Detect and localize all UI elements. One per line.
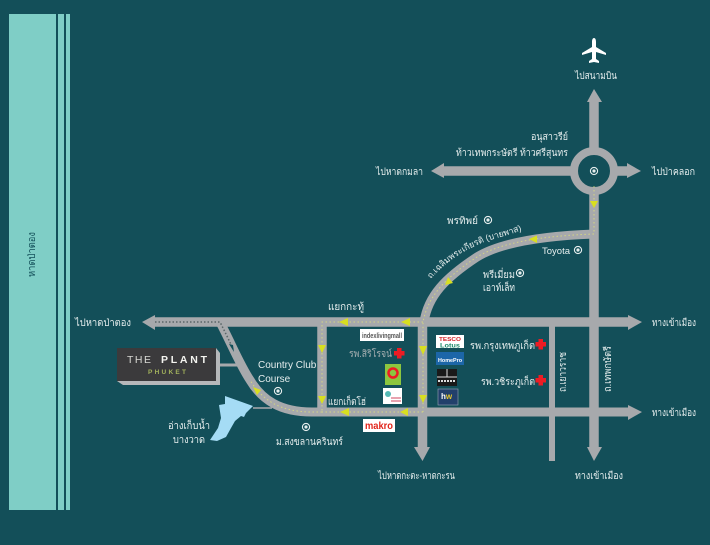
logo: Makro: makro xyxy=(365,421,393,432)
logo: Big C xyxy=(385,364,401,385)
beach strip xyxy=(9,14,70,510)
The Plant Phuket sign: THE xyxy=(127,354,151,366)
route dots xyxy=(250,186,594,412)
logo: festival xyxy=(383,388,402,404)
place and direction labels xyxy=(74,70,696,482)
place and direction labels: รพ.วชิระภูเก็ต xyxy=(481,374,535,388)
landmark markers xyxy=(274,167,598,431)
The Plant Phuket sign: PLANT xyxy=(161,354,208,366)
place and direction labels: Course xyxy=(258,374,291,385)
place and direction labels: ม.สงขลานครินทร์ xyxy=(276,436,344,448)
logo: Tesco Lotus: Lotus xyxy=(440,342,460,350)
place and direction labels: ทางเข้าเมือง xyxy=(575,470,623,482)
beach label: หาดป่าตอง xyxy=(27,232,38,277)
road network xyxy=(142,89,642,461)
logo: black and white store xyxy=(437,369,457,386)
logo: hw: hw xyxy=(441,392,453,401)
place and direction labels: รพ.สิริโรจน์ xyxy=(349,347,392,360)
place and direction labels: ทางเข้าเมือง xyxy=(652,317,696,329)
logo: HomePro: HomePro xyxy=(438,358,462,364)
reservoir xyxy=(210,396,253,441)
place and direction labels: พรีเมี่ยม xyxy=(483,267,515,281)
place and direction labels: Toyota xyxy=(542,246,571,257)
logo: Tesco Lotus: TESCO xyxy=(439,337,462,343)
place and direction labels: แยกกะทู้ xyxy=(328,301,364,313)
hospital crosses xyxy=(394,339,546,386)
place and direction labels: บางวาด xyxy=(173,435,205,446)
place and direction labels: Country Club xyxy=(258,360,317,371)
place and direction labels: เอาท์เล็ท xyxy=(483,280,515,294)
reservoir connector xyxy=(253,407,272,409)
The Plant Phuket sign xyxy=(117,348,237,385)
The Plant Phuket sign: PHUKET xyxy=(148,369,186,376)
place and direction labels: พรทิพย์ xyxy=(447,215,478,227)
place and direction labels: ถ.เฉลิมพระเกียรติ (บายพาส) xyxy=(428,225,521,278)
place and direction labels: รพ.กรุงเทพภูเก็ต xyxy=(470,338,535,352)
place and direction labels: อนุสาวรีย์ xyxy=(531,131,568,143)
direction arrows xyxy=(253,201,598,416)
place and direction labels: ท้าวเทพกระษัตรี ท้าวศรีสุนทร xyxy=(456,147,569,159)
icon: airplane xyxy=(582,38,606,63)
place and direction labels: ถ.เยาวราช xyxy=(558,352,569,392)
store logos xyxy=(360,329,464,432)
place and direction labels: ไปสนามบิน xyxy=(574,70,617,82)
place and direction labels: ถ.เทพกษัตรี xyxy=(602,345,614,392)
place and direction labels: ไปป่าคลอก xyxy=(651,166,695,178)
place and direction labels: ไปหาดป่าตอง xyxy=(74,317,131,329)
arrowheads xyxy=(142,89,642,461)
logo: Tesco Lotus xyxy=(436,335,464,350)
place and direction labels: อ่างเก็บน้ำ xyxy=(168,418,210,432)
logo: Index Living Mall: indexlivingmall xyxy=(362,333,402,340)
place and direction labels: ไปหาดกะตะ-หาดกะรน xyxy=(377,470,455,482)
place and direction labels: ไปหาดกมลา xyxy=(375,166,423,178)
place and direction labels: แยกเก็ตโฮ่ xyxy=(328,394,366,408)
place and direction labels: ทางเข้าเมือง xyxy=(652,407,696,419)
